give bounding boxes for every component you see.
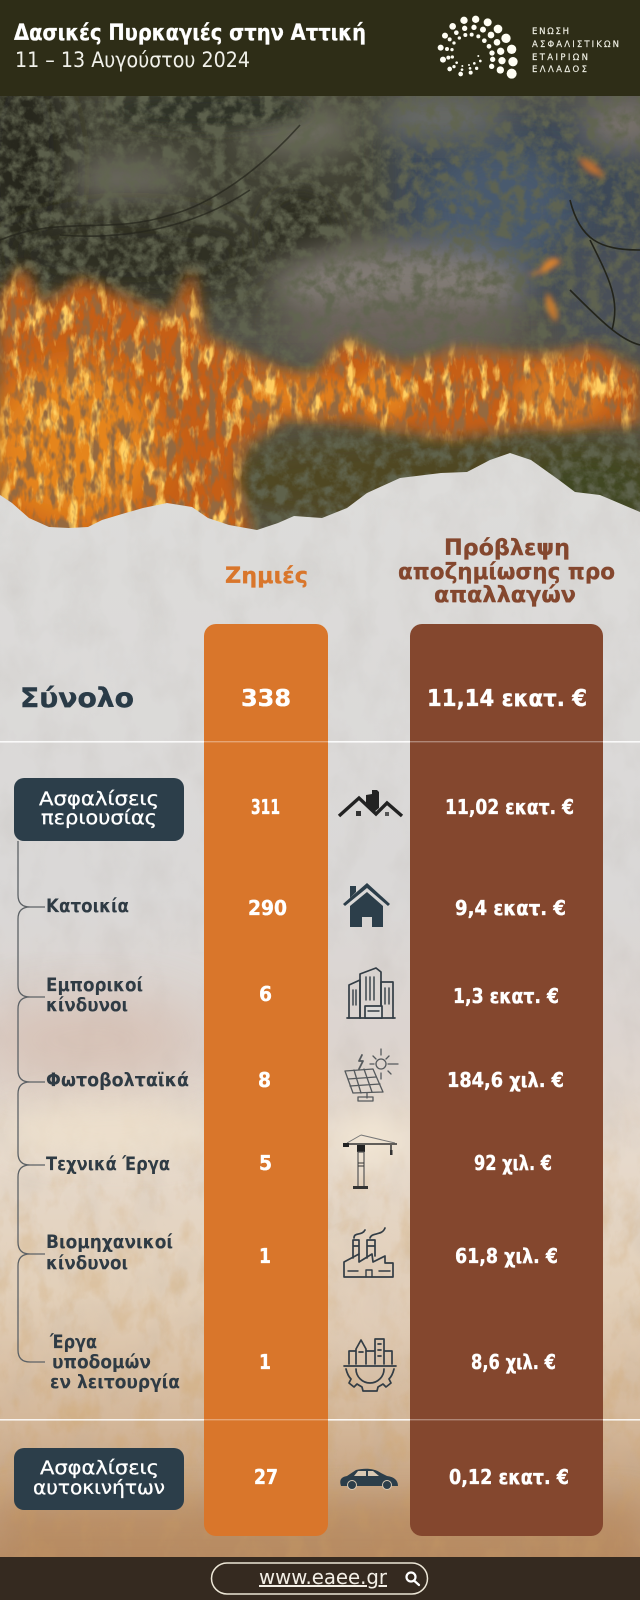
photo: forest wildfire (0, 96, 640, 530)
label pill: property insurance: περιουσίας (41, 807, 157, 829)
logo wordmark: ΕΛΛΑΔΟΣ (532, 65, 587, 75)
logo wordmark: ΕΤΑΙΡΙΩΝ (532, 53, 588, 63)
row: property insurance values: 311 (251, 795, 280, 819)
row: residential: 9,4 εκατ. € (455, 896, 566, 920)
subtitle: dates: 11 – 13 Αυγούστου 2024 (15, 48, 250, 72)
row: commercial risks: 1,3 εκατ. € (453, 984, 559, 1008)
row: property insurance values (251, 795, 574, 819)
row: car insurance values (254, 1465, 569, 1489)
column heading: damages: Ζημιές (225, 564, 308, 589)
row: commercial risks: 6 (259, 982, 272, 1006)
row: technical works: Τεχνικά Έργα (46, 1153, 170, 1175)
row: residential (46, 895, 566, 920)
row: total: 11,14 εκατ. € (427, 686, 587, 712)
row: total (20, 683, 587, 714)
column heading: compensation forecast: απαλλαγών (434, 583, 576, 608)
label pill: property insurance: Ασφαλίσεις (39, 788, 159, 810)
row: operating infrastructure: 1 (259, 1350, 271, 1374)
icon: magnifier (406, 1572, 419, 1585)
row: industrial risks: κίνδυνοι (46, 1252, 128, 1274)
icon: house (343, 883, 390, 927)
row: car insurance values: 0,12 εκατ. € (449, 1465, 569, 1489)
header band (0, 0, 640, 96)
row: industrial risks: Βιομηχανικοί (46, 1231, 173, 1253)
logo: dotted swirl (438, 16, 518, 79)
row: photovoltaics: 184,6 χιλ. € (447, 1068, 564, 1092)
row: total: Σύνολο (20, 683, 134, 714)
row: car insurance values: 27 (254, 1465, 278, 1489)
panel ghost photo texture (0, 440, 640, 1580)
row: operating infrastructure: 8,6 χιλ. € (471, 1350, 556, 1374)
row: commercial risks: Εμπορικοί (46, 974, 143, 996)
column heading: compensation forecast: Πρόβλεψη (444, 536, 570, 561)
row: property insurance values: 11,02 εκατ. € (445, 795, 574, 819)
title: Δασικές Πυρκαγιές στην Αττική (14, 21, 366, 46)
row: technical works: 5 (259, 1151, 272, 1175)
logo wordmark (532, 27, 619, 75)
tree connector (18, 841, 45, 1362)
icon: tower crane (343, 1135, 397, 1189)
icon: factory (344, 1228, 393, 1277)
logo wordmark: ΕΝΩΣΗ (532, 27, 569, 37)
row: operating infrastructure: Έργα (49, 1331, 97, 1353)
divider overlay on bars (204, 741, 603, 1420)
logo wordmark: ΑΣΦΑΛΙΣΤΙΚΩΝ (532, 40, 619, 50)
row: operating infrastructure: υποδομών (52, 1351, 151, 1373)
footer band (0, 1557, 640, 1600)
row: total: 338 (241, 686, 291, 712)
row: photovoltaics (46, 1068, 564, 1092)
column: compensation bar (410, 624, 603, 1536)
paper panel with torn mountain edge (0, 453, 640, 1560)
row: commercial risks (46, 974, 559, 1016)
row: operating infrastructure: εν λειτουργία (50, 1371, 180, 1393)
row: industrial risks (46, 1231, 558, 1274)
label pill: car insurance: αυτοκινήτων (33, 1477, 165, 1499)
row: commercial risks: κίνδυνοι (46, 994, 128, 1016)
row: residential: Κατοικία (46, 895, 129, 917)
icon: solar panel (345, 1049, 398, 1101)
divider lines (0, 741, 640, 1421)
footer url pill (212, 1563, 428, 1594)
row: operating infrastructure (49, 1331, 556, 1393)
row: residential: 290 (248, 896, 287, 920)
column: damages bar (204, 624, 328, 1536)
label pill: property insurance (14, 778, 184, 841)
row: industrial risks: 61,8 χιλ. € (455, 1244, 558, 1268)
row: technical works (46, 1151, 552, 1175)
column heading: compensation forecast: αποζημίωσης προ (398, 560, 615, 585)
row: photovoltaics: Φωτοβολταϊκά (46, 1069, 189, 1091)
column heading: compensation forecast (398, 536, 615, 608)
icon: car (340, 1469, 398, 1490)
icon: city and gear (344, 1339, 396, 1391)
row: photovoltaics: 8 (258, 1068, 271, 1092)
label pill: car insurance (14, 1448, 184, 1510)
footer url pill: www.eaee.gr (259, 1565, 388, 1589)
row: technical works: 92 χιλ. € (474, 1151, 552, 1175)
icon: roof and buildings (339, 790, 402, 816)
row: industrial risks: 1 (259, 1244, 271, 1268)
label pill: car insurance: Ασφαλίσεις (40, 1457, 159, 1479)
icon: office towers (347, 968, 395, 1018)
